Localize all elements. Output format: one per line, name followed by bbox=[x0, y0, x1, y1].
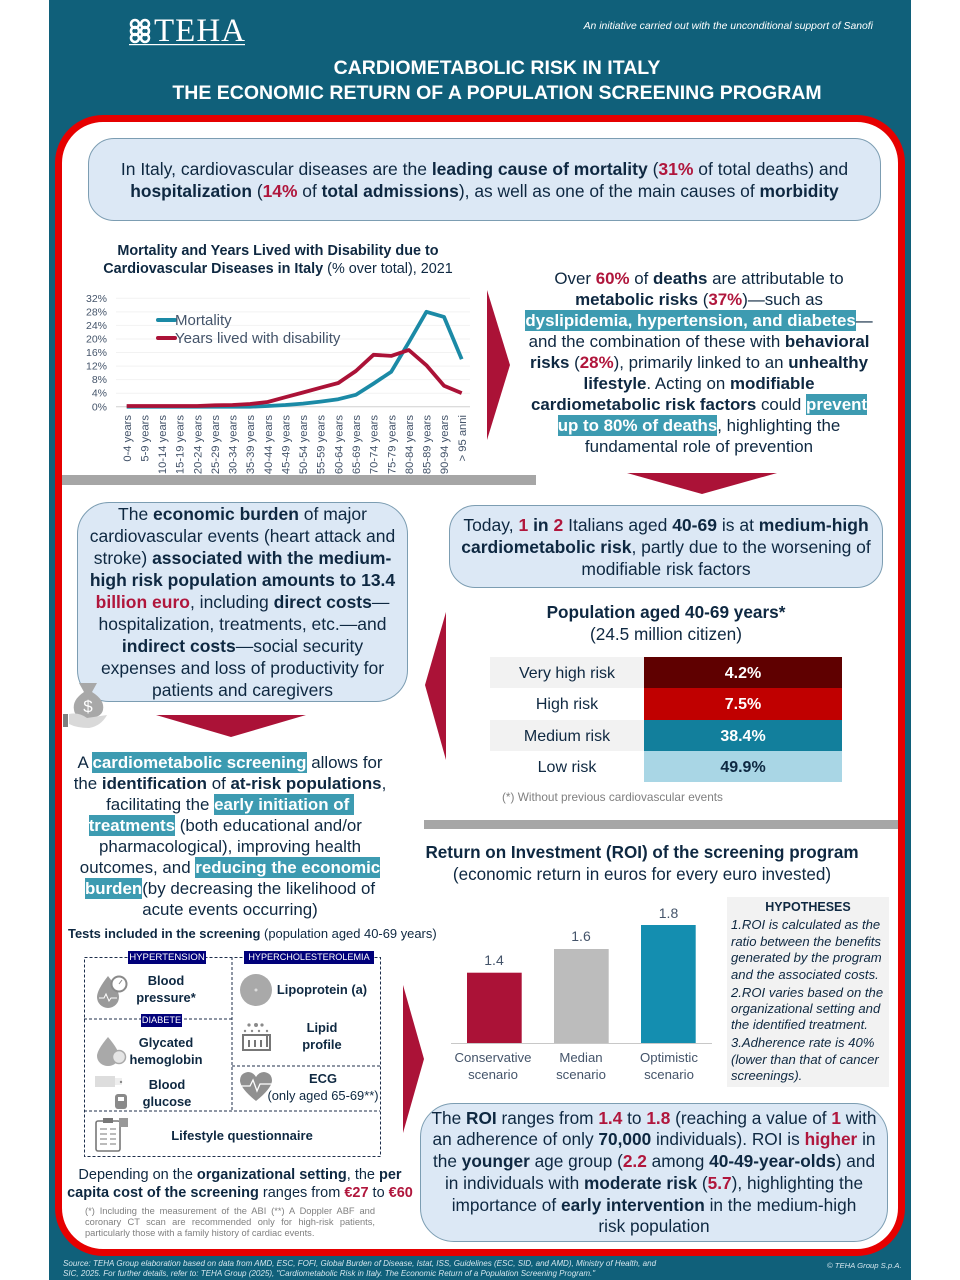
text block: cardiometabolic screening: treatments (both educational and/or bbox=[89, 816, 362, 835]
population heading: (24.5 million citizen) bbox=[590, 624, 742, 644]
line chart: mortality and years lived with disability: 0-4 years bbox=[122, 415, 134, 462]
bar chart: roi scenarios: scenario bbox=[644, 1067, 694, 1082]
economic burden callout: expenses and loss of productivity for bbox=[101, 658, 384, 678]
roi callout: the younger age group (2.2 among 40-49-year-olds) and bbox=[433, 1151, 875, 1171]
divider bar right bbox=[424, 820, 898, 829]
chart title: Mortality and Years Lived with Disability due to bbox=[117, 242, 439, 258]
population heading bbox=[547, 602, 786, 644]
hypotheses panel: the identified treatment. bbox=[731, 1017, 868, 1032]
row: low risk bbox=[538, 751, 842, 782]
line chart: mortality and years lived with disability: 0% bbox=[92, 402, 107, 414]
roi heading bbox=[425, 843, 859, 884]
icon: money bag in hand: $ bbox=[83, 697, 93, 716]
roi heading: (economic return in euros for every euro invested) bbox=[453, 865, 831, 884]
risk callout: cardiometabolic risk, partly due to the worsening of bbox=[461, 536, 871, 556]
line chart: mortality and years lived with disability: 15-19 years bbox=[175, 415, 187, 474]
source note: SIC, 2025. For further details, refer to: TEHA Group (2025), "Cardiometabolic Risk in Italy. The Economic Return of a Population Screening Program." bbox=[63, 1268, 595, 1278]
intro callout: hospitalization (14% of total admissions), as well as one of the main causes of morbidity bbox=[130, 181, 839, 201]
text block: cardiometabolic screening: the identification of at-risk populations, bbox=[74, 774, 386, 793]
row: low risk: Low risk bbox=[538, 759, 596, 776]
hypotheses panel bbox=[727, 897, 889, 1087]
economic burden callout: billion euro, including direct costs— bbox=[96, 592, 389, 612]
risk callout: Today, 1 in 2 Italians aged 40-69 is at medium-high bbox=[463, 514, 869, 534]
text block: cardiometabolic screening: facilitating the early initiation of bbox=[106, 795, 349, 814]
icon: questionnaire bbox=[95, 1118, 128, 1152]
roi callout: The ROI ranges from 1.4 to 1.8 (reaching a value of 1 with bbox=[432, 1108, 876, 1128]
hypotheses panel: (lower than that of cancer bbox=[731, 1052, 879, 1067]
main card with red border bbox=[55, 115, 905, 1256]
row: high risk: High risk bbox=[536, 696, 598, 713]
footnote: tests bbox=[85, 1206, 375, 1238]
bar chart: roi scenarios: Optimistic bbox=[640, 1050, 698, 1065]
label: blood pressure: Blood bbox=[148, 973, 184, 988]
arrow: tests to roi bbox=[403, 985, 424, 1133]
text block: attributable risks: metabolic risks (37%)—such as bbox=[575, 290, 823, 309]
row: very high risk: 4.2% bbox=[725, 665, 761, 682]
economic burden callout: high risk population amounts to 13.4 bbox=[90, 570, 395, 590]
hypotheses panel: and the associated costs. bbox=[731, 967, 879, 982]
label: glycated hemoglobin: hemoglobin bbox=[129, 1052, 203, 1067]
label: lipid profile: profile bbox=[302, 1037, 342, 1052]
line chart: mortality and years lived with disability: 40-44 years bbox=[263, 415, 275, 474]
arrow: left to economic burden bbox=[425, 612, 446, 760]
intro callout bbox=[88, 138, 881, 221]
divider bar left bbox=[62, 475, 536, 485]
chart title: Cardiovascular Diseases in Italy (% over total), 2021 bbox=[103, 260, 453, 276]
line chart: mortality and years lived with disability: 55-59 years bbox=[316, 415, 328, 474]
label: glycated hemoglobin bbox=[129, 1035, 203, 1067]
text block: cardiometabolic screening bbox=[74, 752, 386, 919]
chart title bbox=[103, 242, 453, 276]
copyright: © TEHA Group S.p.A. bbox=[827, 1261, 902, 1270]
line chart: mortality and years lived with disability: 4% bbox=[92, 388, 107, 400]
label: lipid profile bbox=[302, 1020, 342, 1052]
risk callout bbox=[449, 505, 883, 588]
row: low risk: 49.9% bbox=[720, 759, 766, 776]
tests heading: Tests included in the screening (population aged 40-69 years) bbox=[68, 926, 437, 941]
footnote: tests: (*) Including the measurement of the ABI (**) A Doppler ABF and bbox=[85, 1206, 375, 1216]
hypotheses panel: HYPOTHESES bbox=[765, 900, 851, 914]
bar chart: roi scenarios: 1.8 bbox=[659, 905, 678, 921]
bar chart: roi scenarios: Conservative bbox=[455, 1050, 531, 1065]
line chart: mortality and years lived with disability: 5-9 years bbox=[139, 415, 151, 462]
economic burden callout: hospitalization, treatments, etc.—and bbox=[99, 614, 386, 634]
text block: per capita cost: Depending on the organizational setting, the per bbox=[78, 1167, 402, 1183]
icon: lipoprotein bbox=[240, 974, 272, 1006]
label: glycated hemoglobin: Glycated bbox=[139, 1035, 193, 1050]
roi callout: importance of early intervention in the medium-high bbox=[452, 1195, 856, 1215]
bar chart: roi scenarios: 1.4 bbox=[484, 952, 504, 968]
dashed grid bbox=[84, 957, 381, 1157]
bar chart: roi scenarios: scenario bbox=[468, 1067, 518, 1082]
line chart: mortality and years lived with disability: 32% bbox=[86, 293, 107, 305]
risk table bbox=[490, 657, 842, 782]
row: medium risk: Medium risk bbox=[524, 728, 610, 745]
hypotheses panel: organizational setting and bbox=[731, 1001, 880, 1016]
line chart: mortality and years lived with disability: 80-84 years bbox=[404, 415, 416, 474]
icon: heart with ecg bbox=[240, 1072, 272, 1101]
line chart: mortality and years lived with disability: 28% bbox=[86, 306, 107, 318]
title: CARDIOMETABOLIC RISK IN ITALY bbox=[334, 56, 660, 78]
text block: cardiometabolic screening: burden(by decreasing the likelihood of bbox=[85, 879, 375, 898]
label: ecg bbox=[267, 1071, 379, 1103]
bar chart: roi scenarios: Median bbox=[559, 1050, 603, 1065]
line chart: mortality and years lived with disability: 20% bbox=[86, 334, 107, 346]
line chart: mortality and years lived with disability: 35-39 years bbox=[245, 415, 257, 474]
footnote: tests: particularly those with a family history of cardiac events. bbox=[85, 1228, 314, 1238]
roi callout: risk population bbox=[598, 1216, 710, 1236]
hypotheses panel: generated by the program bbox=[731, 950, 882, 965]
icon: blood pressure bbox=[97, 976, 128, 1008]
label: blood glucose: Blood bbox=[149, 1077, 185, 1092]
logo: TEHA: TEHA bbox=[154, 13, 246, 49]
hypotheses panel: 3.Adherence rate is 40% bbox=[731, 1035, 874, 1050]
text block: attributable risks: Over 60% of deaths are attributable to bbox=[554, 269, 844, 288]
line chart: mortality and years lived with disability: 24% bbox=[86, 320, 107, 332]
economic burden callout bbox=[77, 502, 408, 702]
bar chart: roi scenarios: scenario bbox=[556, 1067, 606, 1082]
text block: cardiometabolic screening: A cardiometabolic screening allows for bbox=[77, 753, 383, 772]
text block: attributable risks: risks (28%), primarily linked to an unhealthy bbox=[530, 353, 868, 372]
text block: attributable risks: dyslipidemia, hypertension, and diabetes— bbox=[525, 311, 873, 330]
line chart: mortality and years lived with disability: 12% bbox=[86, 360, 107, 372]
roi callout: an adherence of only 70,000 individuals). ROI is higher in bbox=[432, 1129, 876, 1149]
text block: cardiometabolic screening: pharmacological), improving health bbox=[99, 837, 361, 856]
line chart: mortality and years lived with disability: 75-79 years bbox=[386, 415, 398, 474]
population heading: Population aged 40-69 years* bbox=[547, 602, 785, 622]
hypotheses panel: 1.ROI is calculated as the bbox=[731, 917, 880, 932]
line chart: mortality and years lived with disability: 70-74 years bbox=[369, 415, 381, 474]
line chart: mortality and years lived with disability: 60-64 years bbox=[333, 415, 345, 474]
title: THE ECONOMIC RETURN OF A POPULATION SCREENING PROGRAM bbox=[172, 82, 822, 104]
panel: tests in the screening bbox=[84, 951, 381, 1157]
label: blood pressure: pressure* bbox=[136, 990, 196, 1005]
hypotheses panel: screenings). bbox=[731, 1068, 802, 1083]
footnote: tests: coronary CT scan are recommended only for high-risk patients, bbox=[85, 1216, 375, 1226]
text block: cardiometabolic screening: acute events occurring) bbox=[142, 900, 318, 919]
economic burden callout: stroke) associated with the medium- bbox=[94, 548, 391, 568]
line chart: mortality and years lived with disability: 20-24 years bbox=[192, 415, 204, 474]
line chart: mortality and years lived with disability: 8% bbox=[92, 374, 107, 386]
row: medium risk bbox=[490, 720, 842, 751]
risk callout: modifiable risk factors bbox=[581, 558, 751, 578]
text block: attributable risks: lifestyle. Acting on modifiable bbox=[584, 374, 814, 393]
line chart: mortality and years lived with disability: 65-69 years bbox=[351, 415, 363, 474]
line chart: mortality and years lived with disability: 25-29 years bbox=[210, 415, 222, 474]
row: medium risk: 38.4% bbox=[720, 728, 766, 745]
arrow: chart to text bbox=[487, 290, 510, 440]
row: very high risk: Very high risk bbox=[519, 665, 615, 682]
label: ecg: (only aged 65-69**) bbox=[267, 1088, 379, 1103]
economic burden callout: indirect costs—social security bbox=[122, 636, 363, 656]
label: blood pressure bbox=[136, 973, 196, 1005]
tag: hypertension: HYPERTENSION bbox=[129, 952, 205, 963]
footnote: table: (*) Without previous cardiovascular events bbox=[502, 790, 723, 804]
line chart: mortality and years lived with disability: 85-89 years bbox=[422, 415, 434, 474]
source note bbox=[63, 1259, 656, 1278]
icon: money bag in hand bbox=[63, 683, 107, 728]
line chart: mortality and years lived with disability: 16% bbox=[86, 347, 107, 359]
roi callout: in individuals with moderate risk (5.7), highlighting the bbox=[445, 1173, 863, 1193]
text block: per capita cost: capita cost of the screening ranges from €27 to €60 bbox=[67, 1185, 413, 1201]
label: blood glucose: glucose bbox=[143, 1094, 191, 1109]
line chart: mortality and years lived with disability: 10-14 years bbox=[157, 415, 169, 474]
roi heading: Return on Investment (ROI) of the screening program bbox=[425, 843, 859, 862]
title bbox=[172, 56, 822, 104]
sponsor note: An initiative carried out with the unconditional support of Sanofi bbox=[584, 21, 873, 32]
label: lipid profile: Lipid bbox=[307, 1020, 337, 1035]
label: lifestyle questionnaire: Lifestyle questionnaire bbox=[171, 1128, 313, 1143]
text block: cardiometabolic screening: outcomes, and reducing the economic bbox=[80, 858, 380, 877]
hypotheses panel: ratio between the benefits bbox=[731, 934, 881, 949]
icon: blood glucose bbox=[95, 1076, 127, 1109]
label: ecg: ECG bbox=[309, 1071, 337, 1086]
row: high risk bbox=[536, 688, 842, 720]
intro callout: In Italy, cardiovascular diseases are the leading cause of mortality (31% of total deaths) and bbox=[121, 159, 848, 179]
line chart: mortality and years lived with disability: 30-34 years bbox=[228, 415, 240, 474]
hypotheses panel: 2.ROI varies based on the bbox=[731, 985, 883, 1000]
line chart: mortality and years lived with disability: 50-54 years bbox=[298, 415, 310, 474]
line chart: mortality and years lived with disability: Years lived with disability bbox=[175, 330, 341, 347]
economic burden callout: patients and caregivers bbox=[152, 680, 333, 700]
row: high risk: 7.5% bbox=[725, 696, 761, 713]
text block: attributable risks: cardiometabolic risk factors could prevent bbox=[531, 395, 867, 414]
label: blood glucose bbox=[143, 1077, 191, 1109]
row: very high risk bbox=[490, 657, 842, 688]
line chart: mortality and years lived with disability: 90-94 years bbox=[439, 415, 451, 474]
line chart: mortality and years lived with disability: Mortality bbox=[175, 312, 232, 329]
bar chart: roi scenarios: 1.6 bbox=[571, 928, 591, 944]
icon: glycated hemoglobin bbox=[97, 1037, 126, 1066]
tag: hypercholesterolemia: HYPERCHOLESTEROLEMIA bbox=[248, 952, 370, 962]
text block: attributable risks bbox=[525, 269, 873, 456]
line chart: mortality and years lived with disability bbox=[86, 293, 470, 474]
line chart: mortality and years lived with disability: 45-49 years bbox=[280, 415, 292, 474]
tag: diabete: DIABETE bbox=[142, 1015, 181, 1025]
arrow: down to screening bbox=[156, 715, 306, 737]
economic burden callout: The economic burden of major bbox=[118, 504, 367, 524]
label: lipoprotein: Lipoprotein (a) bbox=[277, 982, 367, 997]
source note: Source: TEHA Group elaboration based on data from AMD, ESC, FOFI, Global Burden of Disease, Istat, ISS, Guidelines (ESC, SID, and AMD), Ministry of Health, and bbox=[63, 1259, 656, 1268]
icon: lipid profile bbox=[242, 1023, 271, 1051]
line chart: mortality and years lived with disability: > 95 anni bbox=[457, 415, 469, 461]
text block: attributable risks: and the combination of these with behavioral bbox=[529, 332, 869, 351]
arrow: down to risk callout bbox=[627, 473, 777, 494]
text block: attributable risks: up to 80% of deaths, highlighting the bbox=[558, 416, 840, 435]
economic burden callout: cardiovascular events (heart attack and bbox=[90, 526, 395, 546]
bar chart: roi scenarios bbox=[451, 905, 712, 1082]
text block: per capita cost bbox=[67, 1167, 413, 1201]
roi callout bbox=[420, 1103, 888, 1242]
text block: attributable risks: fundamental role of prevention bbox=[585, 437, 813, 456]
